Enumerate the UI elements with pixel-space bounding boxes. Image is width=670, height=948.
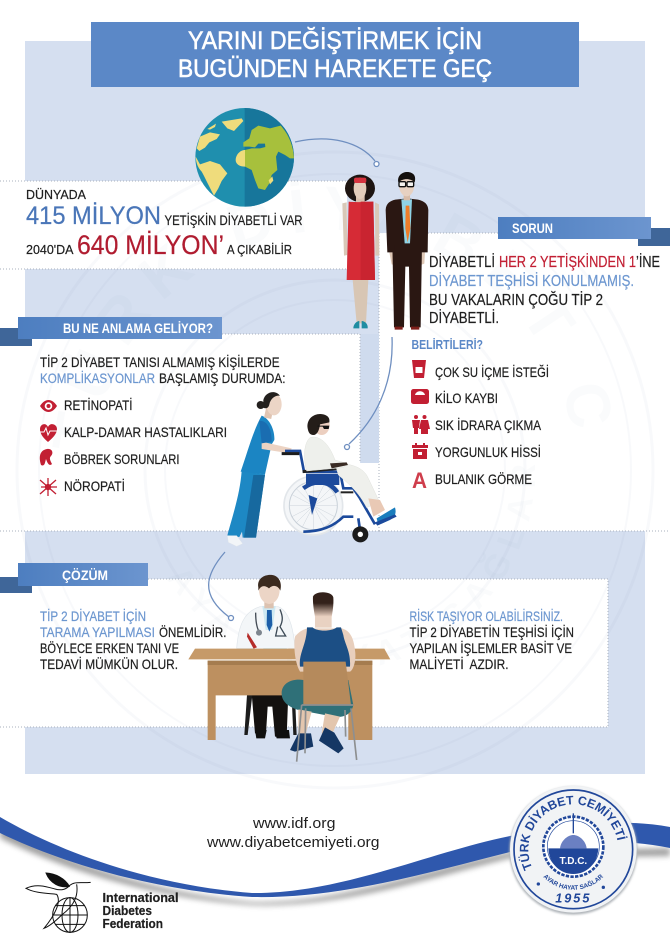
text block: symptoms: SIK İDRARA ÇIKMA: [435, 416, 542, 433]
logo: International Diabetes Federation: Diabetes: [102, 903, 152, 918]
patient: [304, 414, 397, 526]
section label: cozum: [0, 563, 148, 593]
text block: risk: YAPILAN İŞLEMLER BASİT VE: [410, 639, 572, 656]
icon: restroom people: [412, 415, 430, 434]
icon: blurred letter A: A: [412, 468, 427, 493]
text block: screening: TEDAVİ MÜMKÜN OLUR.: [40, 655, 178, 672]
nurse: [227, 392, 292, 546]
section label: bu ne anlama geliyor: BU NE ANLAMA GELİYOR?: [63, 321, 213, 336]
woman: [342, 175, 379, 328]
logo: Turk Diyabet Cemiyeti seal: 1955: [555, 892, 591, 906]
panel: solution: [0, 579, 608, 727]
text block: symptoms: BELİRTİLERİ?: [412, 337, 483, 352]
logo: International Diabetes Federation: [26, 873, 178, 932]
text block: complications intro: KOMPLİKASYONLAR: [40, 369, 155, 386]
logo: Turk Diyabet Cemiyeti seal: AYAR HAYAT SAĞLAR: [543, 874, 604, 890]
icon: cup: [412, 360, 426, 378]
title: [91, 22, 579, 87]
background panel: [25, 41, 645, 774]
text block: problem: DİYABETLİ: [429, 253, 495, 271]
text block: global statistics: 640 MİLYON’: [77, 229, 224, 260]
arrow: globe to people: [295, 139, 379, 166]
text block: risk: [410, 607, 574, 672]
man: [386, 172, 428, 330]
icon: calendar: [412, 443, 428, 459]
title: YARINI DEĞİŞTİRMEK İÇİN: [188, 26, 482, 55]
section label: bu ne anlama geliyor: [0, 317, 222, 346]
text block: global statistics: [26, 187, 303, 260]
icon: scale: [411, 389, 429, 404]
websites: [206, 815, 380, 851]
text block: screening: TİP 2 DİYABET İÇİN: [40, 607, 146, 624]
arrow: symptoms to patient: [344, 337, 392, 450]
section label: sorun: SORUN: [512, 221, 553, 236]
text block: symptoms: YORGUNLUK HİSSİ: [435, 443, 541, 460]
text block: problem: [429, 253, 660, 327]
list: complications: RETİNOPATİ: [64, 396, 132, 413]
text block: symptoms: BULANIK GÖRME: [435, 470, 532, 487]
icon: heart: [39, 424, 58, 442]
text block: complications intro: TİP 2 DİYABET TANISI ALMAMIŞ KİŞİLERDE: [40, 353, 280, 370]
text block: complications intro: BAŞLAMIŞ DURUMDA:: [159, 370, 286, 386]
panel: what it means: [0, 334, 379, 531]
seated patient: [282, 592, 357, 762]
wheelchair: [282, 451, 375, 542]
text block: screening: [40, 607, 226, 672]
title: BUGÜNDEN HAREKETE GEÇ: [178, 55, 492, 83]
text block: problem: BU VAKALARIN ÇOĞU TİP 2: [429, 291, 603, 309]
icon: globe: [195, 108, 294, 207]
text block: problem: DİYABETLİ.: [429, 309, 499, 327]
text block: global statistics: A ÇIKABİLİR: [227, 242, 292, 257]
text block: symptoms: ÇOK SU İÇME İSTEĞİ: [435, 363, 549, 380]
list: complications: BÖBREK SORUNLARI: [64, 450, 180, 467]
text block: risk: TİP 2 DİYABETİN TEŞHİSİ İÇİN: [410, 623, 574, 640]
text block: screening: TARAMA YAPILMASI: [40, 624, 155, 640]
websites: www.diyabetcemiyeti.org: [206, 834, 380, 851]
text block: screening: ÖNEMLİDİR.: [159, 623, 226, 640]
text block: problem: HER 2 YETİŞKİNDEN 1: [499, 253, 636, 271]
list: complications: [39, 396, 227, 496]
footer wave: [0, 817, 670, 905]
text block: risk: RİSK TAŞIYOR OLABİLİRSİNİZ.: [410, 607, 563, 624]
icon: neuron: [40, 478, 57, 496]
desk: [188, 649, 390, 740]
icon: hummingbird and globe: [26, 873, 91, 932]
text block: screening: BÖYLECE ERKEN TANI VE: [40, 639, 179, 656]
text block: global statistics: 2040'DA: [26, 242, 74, 257]
list: complications: NÖROPATİ: [64, 477, 125, 494]
section label: sorun: [498, 217, 670, 246]
logo: International Diabetes Federation: Federation: [102, 916, 163, 931]
logo: Turk Diyabet Cemiyeti seal: T.D.C.: [559, 856, 587, 867]
text block: global statistics: YETİŞKİN DİYABETLİ VAR: [164, 213, 303, 228]
text block: problem: DİYABET TEŞHİSİ KONULMAMIŞ.: [429, 272, 634, 290]
text block: symptoms: KİLO KAYBI: [435, 389, 498, 406]
websites: www.idf.org: [252, 815, 336, 832]
text block: symptoms: [411, 337, 549, 493]
text block: global statistics: DÜNYADA: [26, 187, 86, 202]
watermark seal: AYAR HAYAT SAĞLAR: [159, 454, 543, 678]
doctor: [237, 575, 297, 738]
logo: International Diabetes Federation: International: [102, 890, 178, 905]
list: complications: KALP-DAMAR HASTALIKLARI: [64, 424, 227, 440]
text block: global statistics: 415 MİLYON: [26, 201, 161, 230]
logo: Turk Diyabet Cemiyeti seal: [508, 786, 638, 916]
illustration: nurse and wheelchair: [227, 392, 397, 546]
illustration: doctor, desk and patient: [188, 575, 390, 762]
arrow: patient to doctor: [209, 552, 234, 620]
section label: cozum: ÇÖZÜM: [62, 568, 108, 583]
icon: eye: [40, 400, 57, 412]
panel: world statistics band: [0, 181, 347, 269]
text block: problem: ’İNE: [636, 253, 660, 271]
text block: complications intro: [40, 353, 286, 386]
panel: problem: [361, 233, 670, 531]
icon: kidney: [40, 449, 52, 465]
text block: risk: MALİYETİ AZDIR.: [410, 655, 508, 672]
illustration: woman and man: [342, 172, 428, 330]
logo: Turk Diyabet Cemiyeti seal: TÜRK DİYABET CEMİYETİ: [518, 796, 628, 872]
